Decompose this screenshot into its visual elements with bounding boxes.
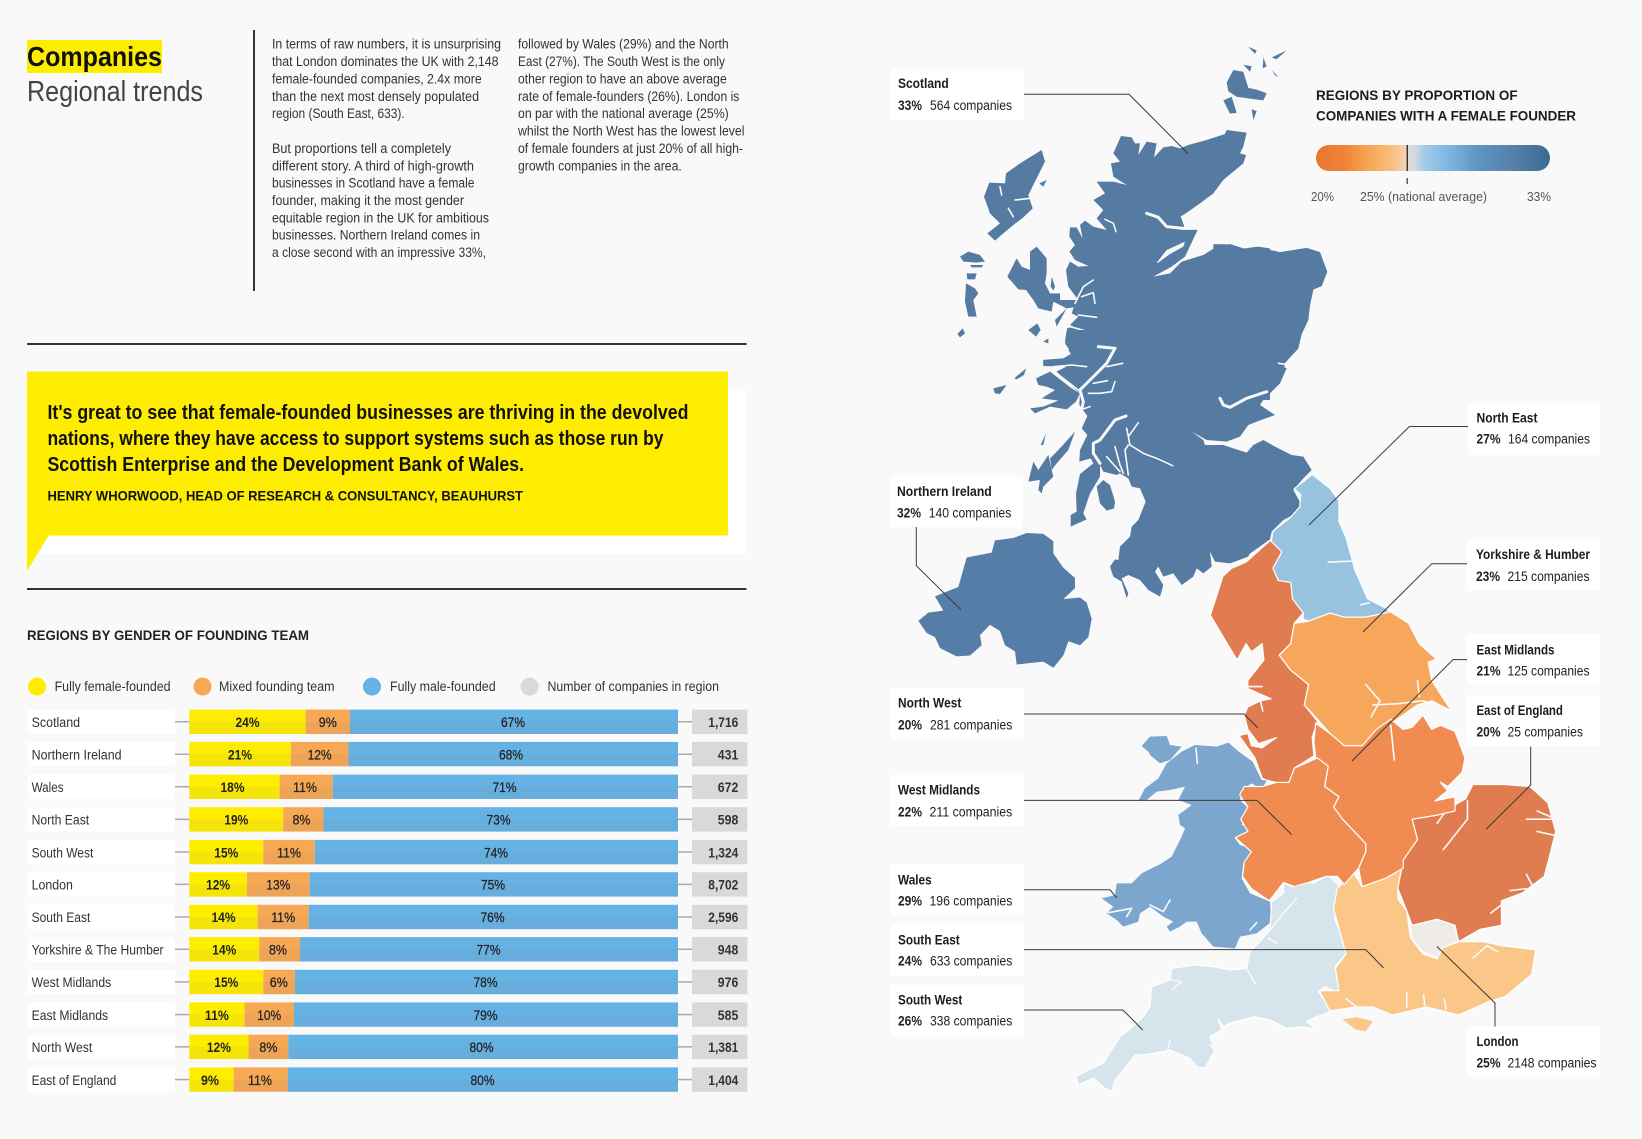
- row: Scotland: 9%: [319, 715, 337, 730]
- map region: North West: [1210, 540, 1317, 782]
- callout: Wales: [891, 864, 1117, 916]
- callout: London: 2148 companies: [1508, 1056, 1597, 1070]
- legend: regions by proportion: COMPANIES WITH A FEMALE FOUNDER: [1316, 108, 1576, 124]
- row: Wales: Wales: [32, 780, 64, 795]
- pull quote panel: Scottish Enterprise and the Development Bank of Wales.: [48, 454, 524, 476]
- title: [27, 40, 203, 108]
- row: Yorkshire & The Humber: [28, 937, 748, 962]
- row: London: London: [32, 878, 73, 893]
- intro text block: left column: [272, 36, 501, 260]
- callout: North East: [1309, 403, 1600, 525]
- legend: regions by proportion: 20%: [1311, 189, 1334, 204]
- intro text block: right column: East (27%). The South West is the only: [518, 54, 725, 69]
- row: Yorkshire & The Humber: 77%: [476, 942, 500, 958]
- row: South East: 76%: [480, 910, 504, 925]
- callout: Scotland: 33%: [898, 98, 922, 113]
- intro text block: left column: equitable region in the UK for ambitious: [272, 210, 489, 226]
- intro text block: right column: followed by Wales (29%) and the North: [518, 36, 729, 52]
- legend: regions by proportion: REGIONS BY PROPORTION OF: [1316, 87, 1518, 103]
- intro text block: right column: whilst the North West has the lowest level: [517, 124, 744, 139]
- chart legend: Number of companies in region: [548, 679, 719, 694]
- row: North West: North West: [32, 1040, 93, 1055]
- map region: Northern Ireland: [918, 533, 1092, 668]
- callout: Yorkshire and Humber: 23%: [1476, 569, 1500, 584]
- callout: East of England: East of England: [1476, 703, 1563, 718]
- row: Northern Ireland: [28, 742, 748, 766]
- intro text block: right column: [517, 36, 744, 174]
- row: Yorkshire & The Humber: Yorkshire & The Humber: [32, 942, 164, 958]
- map region: South West: [1076, 875, 1347, 1092]
- intro text block: left column: But proportions tell a completely: [272, 141, 451, 156]
- row: Northern Ireland: 68%: [499, 747, 523, 762]
- intro text block: left column: region (South East, 633).: [272, 106, 405, 121]
- row: Wales: 11%: [293, 780, 317, 795]
- row: West Midlands: [28, 970, 748, 994]
- intro text block: left column: female-founded companies, 2.4x more: [272, 71, 482, 86]
- callout: Scotland: 564 companies: [930, 98, 1012, 113]
- chart legend: [28, 678, 719, 696]
- map region: Scotland: [957, 47, 1327, 598]
- callout: Northern Ireland: 32%: [897, 506, 921, 520]
- row: Yorkshire & The Humber: 14%: [212, 942, 236, 958]
- callout: South West: South West: [898, 992, 963, 1008]
- legend: regions by proportion: [1311, 87, 1576, 204]
- callout: South East: [891, 924, 1384, 976]
- chart heading: REGIONS BY GENDER OF FOUNDING TEAM: [27, 627, 309, 643]
- callout: South East: South East: [898, 932, 960, 948]
- row: North West: 1,381: [708, 1040, 739, 1055]
- intro text block: left column: In terms of raw numbers, it is unsurprising: [272, 36, 501, 52]
- callout: Scotland: Scotland: [898, 76, 949, 91]
- callout: West Midlands: 211 companies: [930, 804, 1013, 820]
- row: Wales: 18%: [220, 780, 244, 795]
- callout: East of England: 20%: [1476, 724, 1500, 740]
- row: Yorkshire & The Humber: 8%: [269, 942, 287, 958]
- callout: Wales: 29%: [898, 894, 922, 908]
- pull quote panel: It's great to see that female-founded businesses are thriving in the devolved: [48, 402, 688, 424]
- callout: West Midlands: [891, 775, 1292, 835]
- callout: Scotland: [891, 69, 1188, 154]
- row: Scotland: [28, 710, 748, 734]
- callout: North East: 164 companies: [1508, 432, 1590, 446]
- row: South East: [28, 905, 748, 929]
- row: South West: South West: [32, 845, 94, 860]
- callout: London: London: [1476, 1034, 1518, 1049]
- callout: Yorkshire and Humber: 215 companies: [1508, 569, 1590, 584]
- callout: Wales: 196 companies: [930, 894, 1013, 908]
- row: East Midlands: 585: [718, 1008, 739, 1023]
- row: Scotland: 1,716: [708, 715, 739, 730]
- row: Scotland: 24%: [236, 715, 260, 730]
- title: Companies: [27, 41, 162, 72]
- row: South West: 11%: [277, 845, 301, 860]
- intro text block: right column: on par with the national average (25%): [518, 106, 729, 121]
- map region: East of England: [1398, 784, 1556, 942]
- callout: London: 25%: [1476, 1056, 1500, 1070]
- row: East Midlands: [28, 1002, 748, 1027]
- row: Northern Ireland: Northern Ireland: [32, 747, 122, 762]
- row: South West: 74%: [484, 845, 508, 860]
- callout: East of England: [1467, 696, 1600, 829]
- row: South West: 1,324: [708, 845, 739, 860]
- intro text divider: [253, 30, 255, 291]
- row: North East: 598: [718, 813, 739, 828]
- row: West Midlands: West Midlands: [32, 975, 111, 990]
- callout: South West: [891, 985, 1143, 1036]
- legend: regions by proportion: 25% (national average): [1360, 189, 1487, 204]
- row: East Midlands: 10%: [257, 1008, 281, 1023]
- row: East of England: 1,404: [708, 1073, 739, 1088]
- callout: South East: 633 companies: [930, 954, 1013, 968]
- callout: North West: 20%: [898, 718, 922, 732]
- callout: Yorkshire and Humber: [1363, 540, 1600, 632]
- row: Northern Ireland: 21%: [228, 747, 252, 762]
- row: North East: North East: [32, 813, 89, 828]
- callout: Northern Ireland: 140 companies: [929, 506, 1012, 520]
- pull quote panel: [27, 372, 746, 571]
- intro text block: left column: founder, making it the most gender: [272, 193, 464, 208]
- callout: South West: 338 companies: [930, 1014, 1013, 1028]
- chart legend: Mixed founding team: [219, 679, 334, 694]
- row: West Midlands: 15%: [214, 975, 238, 990]
- callout: London: [1437, 946, 1600, 1077]
- callout: South East: 24%: [898, 954, 922, 968]
- row: South East: 14%: [212, 910, 236, 925]
- stacked bar chart: [28, 710, 748, 1092]
- callout: North East: 27%: [1476, 432, 1500, 446]
- row: Scotland: 67%: [501, 715, 525, 730]
- row: East of England: 9%: [201, 1073, 219, 1088]
- map region: South East: [1319, 866, 1536, 1031]
- intro text block: left column: different story. A third of high-growth: [272, 158, 474, 174]
- row: East Midlands: East Midlands: [32, 1008, 108, 1023]
- pull quote panel: HENRY WHORWOOD, HEAD OF RESEARCH & CONSULTANCY, BEAUHURST: [48, 488, 523, 504]
- callout: South West: 26%: [898, 1014, 922, 1028]
- row: East of England: East of England: [32, 1073, 116, 1088]
- intro text block: right column: of female founders at just 20% of all high-: [518, 141, 743, 156]
- row: London: [28, 872, 748, 897]
- chart legend: Fully male-founded: [390, 679, 496, 694]
- intro text block: right column: rate of female-founders (26%). London is: [518, 89, 740, 104]
- intro text block: right column: other region to have an above average: [518, 71, 727, 86]
- intro text block: left column: a close second with an impressive 33%,: [272, 245, 486, 260]
- callout: North West: North West: [898, 696, 962, 710]
- map region: East Midlands: [1314, 715, 1465, 887]
- intro text block: left column: than the next most densely populated: [272, 89, 479, 104]
- callout: Yorkshire and Humber: Yorkshire & Humber: [1476, 547, 1591, 562]
- callout: East Midlands: East Midlands: [1476, 642, 1554, 658]
- callout: North West: 281 companies: [930, 718, 1013, 732]
- row: West Midlands: 78%: [474, 975, 498, 990]
- intro text block: right column: growth companies in the area.: [518, 158, 682, 174]
- intro text block: left column: that London dominates the UK with 2,148: [272, 54, 498, 69]
- map region: North East: [1271, 474, 1391, 621]
- row: Wales: 672: [718, 780, 738, 795]
- row: East Midlands: 79%: [474, 1008, 498, 1023]
- legend: regions by proportion: 33%: [1527, 189, 1551, 204]
- callout: East Midlands: 21%: [1476, 664, 1500, 678]
- row: London: 8,702: [708, 878, 738, 893]
- callout: Northern Ireland: Northern Ireland: [897, 484, 992, 499]
- row: South East: South East: [32, 910, 91, 925]
- callout: East Midlands: 125 companies: [1508, 664, 1590, 678]
- row: Wales: 71%: [492, 780, 516, 795]
- callout: East Midlands: [1352, 634, 1600, 761]
- map region: Yorkshire and Humber: [1279, 612, 1451, 746]
- row: London: 13%: [266, 878, 290, 893]
- row: Scotland: Scotland: [32, 715, 80, 730]
- row: North East: 8%: [292, 813, 310, 828]
- row: North West: 8%: [259, 1040, 277, 1055]
- map region: Wales: [1102, 736, 1272, 948]
- row: Yorkshire & The Humber: 948: [718, 942, 739, 958]
- callout: East of England: 25 companies: [1508, 724, 1583, 740]
- row: London: 75%: [481, 878, 505, 893]
- map region: London: [1410, 918, 1464, 958]
- row: South West: [28, 840, 748, 864]
- row: East of England: [28, 1067, 748, 1092]
- row: North West: 12%: [207, 1040, 231, 1055]
- row: North East: [28, 807, 748, 832]
- callout: North West: [891, 688, 1258, 739]
- row: Northern Ireland: 431: [718, 747, 739, 762]
- pull quote panel: nations, where they have access to support systems such as those run by: [48, 428, 664, 450]
- row: South East: 11%: [271, 910, 295, 925]
- row: South East: 2,596: [708, 910, 739, 925]
- intro text block: left column: businesses. Northern Ireland comes in: [272, 228, 480, 243]
- row: Northern Ireland: 12%: [308, 747, 332, 762]
- title: Regional trends: [27, 76, 203, 108]
- row: North East: 19%: [224, 813, 248, 828]
- callout: West Midlands: 22%: [898, 804, 922, 820]
- callout: Northern Ireland: [890, 476, 1023, 610]
- callout: Wales: Wales: [898, 872, 932, 888]
- row: West Midlands: 976: [718, 975, 739, 990]
- callout: North East: North East: [1476, 410, 1538, 426]
- map of UK regions: [918, 47, 1556, 1092]
- row: West Midlands: 6%: [270, 975, 288, 990]
- row: North West: 80%: [470, 1040, 494, 1055]
- intro text block: left column: businesses in Scotland have a female: [272, 176, 474, 190]
- row: East Midlands: 11%: [205, 1008, 229, 1023]
- callout: West Midlands: West Midlands: [898, 782, 980, 798]
- row: North West: [28, 1035, 748, 1059]
- row: South West: 15%: [214, 845, 238, 860]
- chart legend: Fully female-founded: [55, 679, 171, 694]
- row: London: 12%: [206, 878, 230, 893]
- row: Wales: [28, 775, 748, 799]
- row: North East: 73%: [486, 813, 510, 828]
- map region: West Midlands: [1235, 758, 1366, 901]
- row: East of England: 80%: [470, 1073, 494, 1088]
- row: East of England: 11%: [248, 1073, 272, 1088]
